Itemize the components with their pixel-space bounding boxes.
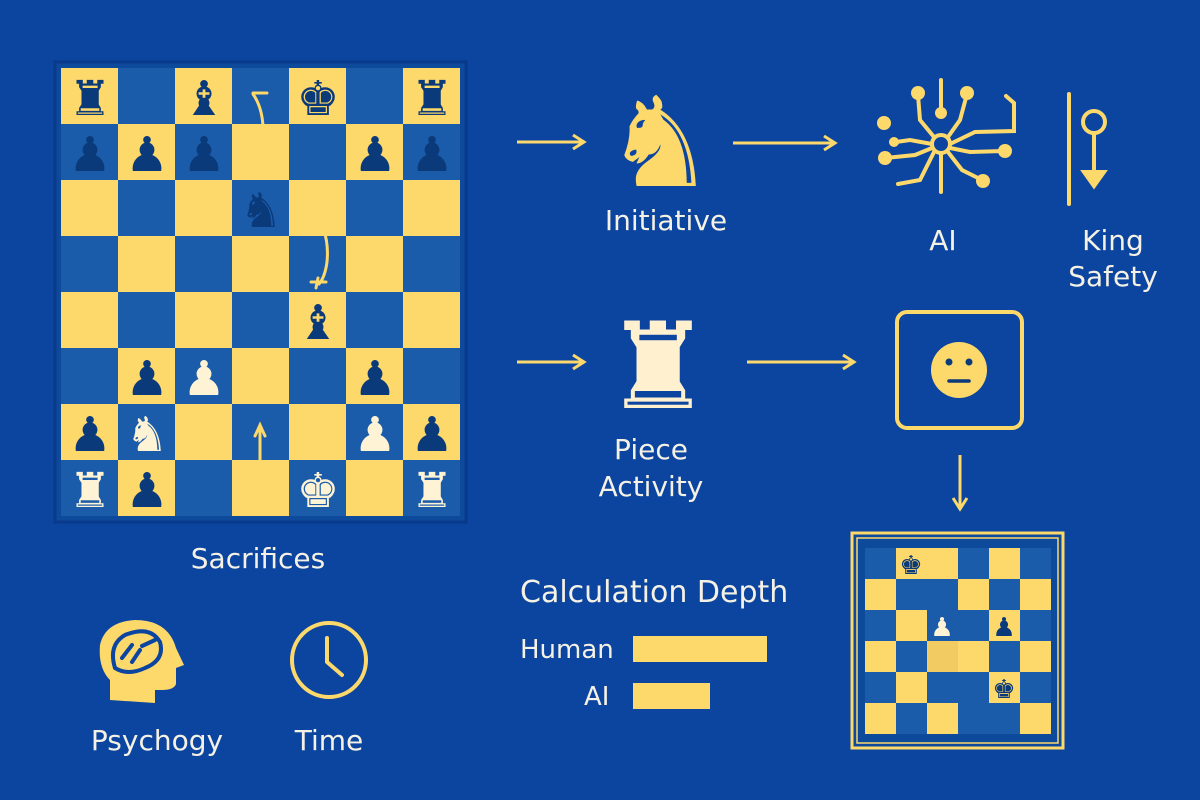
label: Initiative: Initiative <box>605 204 727 237</box>
arrow: to rook <box>517 355 584 369</box>
icon: AI circuit <box>885 80 1014 192</box>
label: Piece Activity <box>599 433 703 503</box>
black pieces: ♟ <box>68 127 112 183</box>
icon: knight: ♞ <box>604 71 716 216</box>
black pieces: ♟ <box>410 127 454 183</box>
label: Time: Time <box>294 724 363 757</box>
black pieces: ♝ <box>296 295 340 351</box>
black pieces: ♞ <box>239 183 283 239</box>
move arrows <box>253 93 327 492</box>
label: King Safety: Safety <box>1068 260 1158 293</box>
heading: Calculation Depth: Calculation Depth <box>520 575 788 610</box>
arrow: to face <box>747 355 854 369</box>
black pieces: ♟ <box>353 351 397 407</box>
black pieces: ♟ <box>68 407 112 463</box>
bar chart: human vs AI: AI <box>584 682 609 712</box>
white pieces: ♟ <box>353 407 397 463</box>
black pieces: ♟ <box>182 127 226 183</box>
black pieces: ♚ <box>296 71 340 127</box>
white pieces: ♜ <box>68 463 112 519</box>
white pieces: ♜ <box>410 463 454 519</box>
label: Piece Activity: Piece <box>614 433 688 466</box>
label: King Safety <box>1068 224 1158 293</box>
black pieces: ♟ <box>125 351 169 407</box>
white pieces <box>68 351 454 519</box>
panel: small board: ♚ <box>899 551 923 581</box>
bar chart: human vs AI: Human <box>520 635 614 665</box>
icon: psychology head <box>100 620 184 703</box>
black pieces: ♟ <box>353 127 397 183</box>
label: AI: AI <box>929 224 957 257</box>
white pieces: ♚ <box>296 463 340 519</box>
black pieces: ♜ <box>68 71 112 127</box>
bar chart: human vs AI <box>520 635 767 712</box>
panel: main chess board <box>55 62 466 522</box>
icon: king safety <box>1069 94 1105 204</box>
white pieces: ♟ <box>182 351 226 407</box>
icon: neutral face box <box>897 312 1022 428</box>
black pieces: ♟ <box>410 407 454 463</box>
arrow: to AI <box>733 136 835 150</box>
label: Psychogy: Psychogy <box>91 724 223 757</box>
label: Piece Activity: Activity <box>599 470 703 503</box>
arrow: to initiative <box>517 135 584 149</box>
arrow: down <box>953 455 967 509</box>
label: King Safety: King <box>1082 224 1144 257</box>
black pieces: ♜ <box>410 71 454 127</box>
label: Sacrifices: Sacrifices <box>191 542 325 575</box>
black pieces: ♟ <box>125 127 169 183</box>
icon: rook: ♜ <box>604 298 712 437</box>
black pieces <box>68 71 454 519</box>
black pieces: ♟ <box>125 463 169 519</box>
black pieces: ♝ <box>182 71 226 127</box>
panel: small board: ♟ <box>992 613 1016 643</box>
panel: small board: ♚ <box>992 675 1016 705</box>
icon: clock <box>292 623 366 697</box>
panel: small board <box>852 533 1063 748</box>
white pieces: ♞ <box>125 407 169 463</box>
panel: small board: ♟ <box>930 613 954 643</box>
